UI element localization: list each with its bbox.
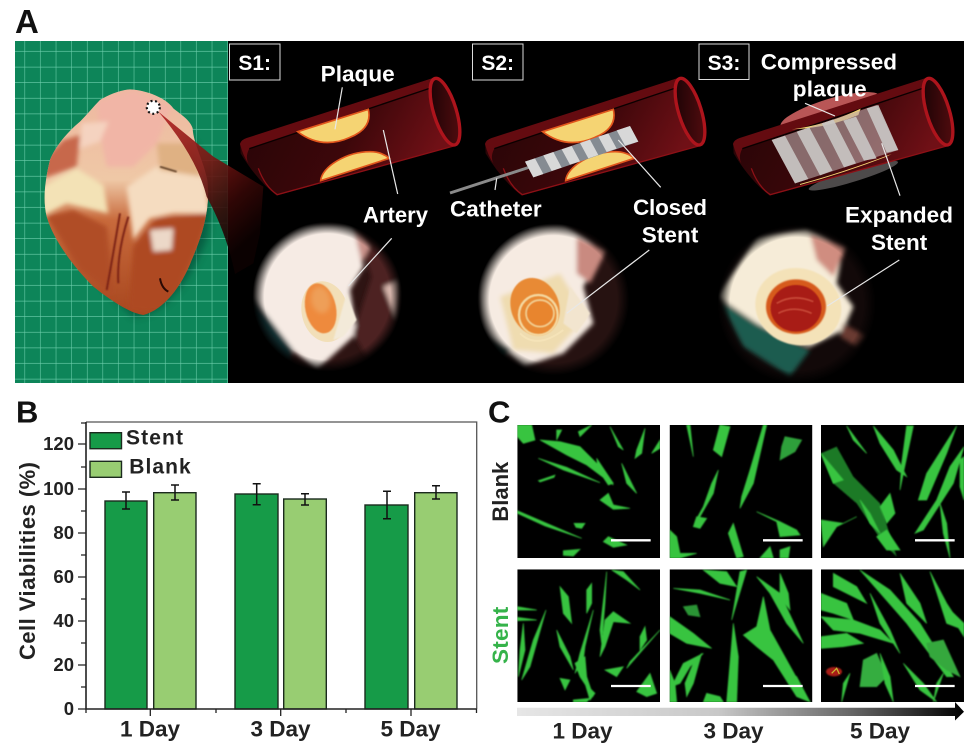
- time arrow: [517, 702, 964, 720]
- scale bars: [611, 540, 955, 686]
- y axis tick labels: [43, 433, 74, 719]
- S3 artery tube: [733, 75, 959, 196]
- y axis tick labels: 0: [64, 698, 74, 719]
- panel B: cell viability bar chart: [15, 422, 477, 742]
- time labels: 1 Day: [552, 718, 613, 743]
- S1 label box: [230, 44, 280, 80]
- photo: green cutting mat: [15, 41, 228, 383]
- time labels: 3 Day: [703, 718, 764, 743]
- S1 label box: S1:: [238, 52, 271, 75]
- time labels: 5 Day: [850, 718, 911, 743]
- S2 artery diagram with catheter and closed stent: [485, 75, 711, 196]
- label: Closed Stent: Stent: [642, 222, 699, 247]
- S1 artery photo: [253, 222, 401, 370]
- callout lines: [335, 87, 900, 313]
- micrograph: Stent 3 Day: [670, 569, 812, 702]
- bars and error bars: [105, 484, 457, 709]
- black schematic background: [228, 41, 964, 383]
- label: Plaque: Plaque: [321, 62, 395, 86]
- panel C: fluorescence micrographs: [488, 425, 964, 743]
- panel label A: A: [15, 3, 39, 40]
- S3 artery photo with expanded stent: [718, 227, 870, 378]
- panel label C: C: [488, 394, 510, 430]
- catheter: [450, 167, 530, 193]
- panel A: heart and stent deployment: [15, 41, 964, 387]
- S1 artery diagram with plaque: [240, 75, 466, 196]
- micrograph: Stent 1 Day: [517, 569, 660, 702]
- S3 label box: S3:: [708, 52, 740, 75]
- S2 label box: S2:: [481, 52, 514, 75]
- axes and ticks: [78, 422, 477, 716]
- x axis labels: 1 Day: [120, 717, 181, 742]
- y axis title: Cell Viabilities (%): [15, 462, 40, 660]
- micrograph: Stent 5 Day: [821, 569, 964, 702]
- row label: Stent: Stent: [488, 606, 513, 664]
- legend: Blank: [129, 455, 191, 478]
- y axis tick labels: 80: [53, 522, 74, 543]
- micrograph: Blank 3 Day: [670, 425, 812, 558]
- label: Compressed plaque: plaque: [793, 77, 867, 102]
- y axis tick labels: 100: [43, 478, 74, 499]
- legend: Stent: [126, 426, 183, 449]
- y axis tick labels: 40: [53, 610, 74, 631]
- closed stent: [525, 126, 638, 177]
- label: Catheter: Catheter: [450, 196, 542, 222]
- y axis tick labels: 120: [43, 433, 74, 454]
- S2 label box: [472, 44, 523, 80]
- label: Expanded Stent: [845, 203, 953, 255]
- x axis labels: 3 Day: [250, 717, 311, 742]
- label: Artery: Artery: [363, 202, 428, 228]
- heart photo: [42, 89, 210, 317]
- legend: [90, 426, 191, 478]
- label: Expanded Stent: Stent: [871, 230, 928, 255]
- x axis labels: [120, 717, 441, 742]
- S3 label box: [699, 44, 749, 80]
- label: Compressed plaque: [761, 49, 897, 102]
- S3 expanded stent: [772, 105, 898, 185]
- label: Closed Stent: Closed: [633, 195, 707, 220]
- label: Closed Stent: [633, 195, 707, 247]
- schematic labels: [321, 49, 953, 255]
- y axis tick labels: 20: [53, 654, 74, 675]
- micrograph: Blank 5 Day: [821, 425, 964, 558]
- panel label B: B: [16, 394, 38, 430]
- y axis tick labels: 60: [53, 566, 74, 587]
- label: Expanded Stent: Expanded: [845, 203, 953, 228]
- label: Compressed plaque: Compressed: [761, 49, 897, 74]
- red zoom wedge: [158, 112, 263, 274]
- micrograph: Blank 1 Day: [517, 425, 660, 558]
- S2 artery photo with rolled stent: [478, 224, 626, 372]
- row label: Blank: Blank: [488, 461, 513, 522]
- S3 compressed plaque bulges: [777, 84, 900, 195]
- x axis labels: 5 Day: [380, 717, 441, 742]
- icon: dotted artery marker: [147, 101, 160, 114]
- time labels: [552, 718, 911, 743]
